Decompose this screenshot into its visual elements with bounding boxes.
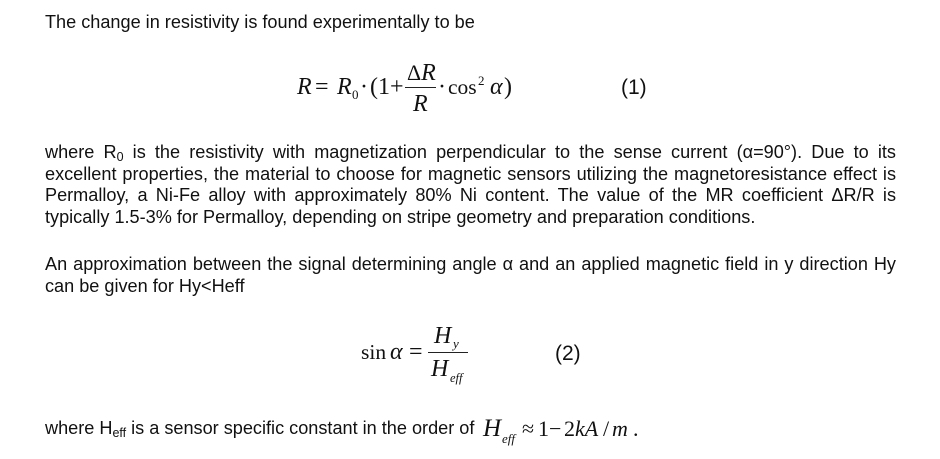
equation 2: y — [451, 336, 459, 351]
inline formula: eff — [502, 431, 517, 446]
equation 1: 1 — [378, 74, 390, 100]
inline formula: m — [612, 416, 628, 441]
equation 2: H — [433, 323, 453, 349]
paragraph: approximation: An approximation between the signal determining angle α and an applied magnetic field in y direction Hy — [45, 254, 896, 274]
equation 1: α — [490, 74, 503, 100]
equation number 2: (2) — [555, 342, 581, 365]
inline formula: 2kA — [564, 416, 599, 441]
paragraph: approximation — [45, 254, 896, 296]
equation 1: · — [438, 74, 446, 100]
equation 1: ΔR — [407, 60, 436, 86]
paragraph: resistivity and Permalloy — [45, 142, 896, 227]
equation 1: R — [412, 91, 428, 117]
paragraph: resistivity and Permalloy: typically 1.5-3% for Permalloy, depending on stripe geometry and preparation conditions. — [45, 207, 755, 227]
equation 1 — [296, 60, 512, 117]
equation 2: H — [430, 356, 450, 382]
equation 2: = — [409, 339, 423, 365]
equation 2 — [361, 323, 468, 385]
paragraph: resistivity and Permalloy: Permalloy, a Ni-Fe alloy with approximately 80% Ni content. The value of the MR coefficient ΔR/R is — [45, 185, 896, 205]
inline formula: ≈ — [522, 416, 534, 441]
paragraph: approximation: can be given for Hy<Heff — [45, 276, 244, 296]
inline formula: H — [482, 415, 503, 442]
equation 1: · — [360, 74, 368, 100]
inline formula: . — [633, 416, 638, 441]
equation 1: = — [315, 74, 329, 100]
equation 2: α — [390, 339, 403, 365]
closing text: where Heff is a sensor specific constant in the order of — [45, 418, 474, 440]
equation 1: 0 — [352, 87, 358, 102]
equation 1: ( — [370, 74, 378, 100]
equation 1: cos — [448, 75, 477, 99]
equation 2: eff — [450, 371, 464, 385]
inline formula — [482, 415, 638, 446]
equation 1: R — [296, 74, 312, 100]
paragraph: resistivity and Permalloy: where R0 is the resistivity with magnetization perpendicular to the sense current (α=90°). Due to its — [45, 142, 896, 164]
equation 2: sin — [361, 340, 386, 364]
equation 1: ) — [504, 74, 512, 100]
paragraph: resistivity and Permalloy: excellent properties, the material to choose for magnetic sensors utilizing the magnetoresistance effect is — [45, 164, 896, 184]
inline formula: − — [549, 416, 561, 441]
equation 1: 2 — [478, 73, 484, 88]
inline formula: 1 — [538, 416, 549, 441]
equation number 1: (1) — [621, 76, 647, 99]
equation 1: R — [336, 74, 352, 100]
intro text: The change in resistivity is found experimentally to be — [45, 12, 475, 32]
equation 1: + — [390, 74, 404, 100]
inline formula: / — [603, 416, 610, 441]
